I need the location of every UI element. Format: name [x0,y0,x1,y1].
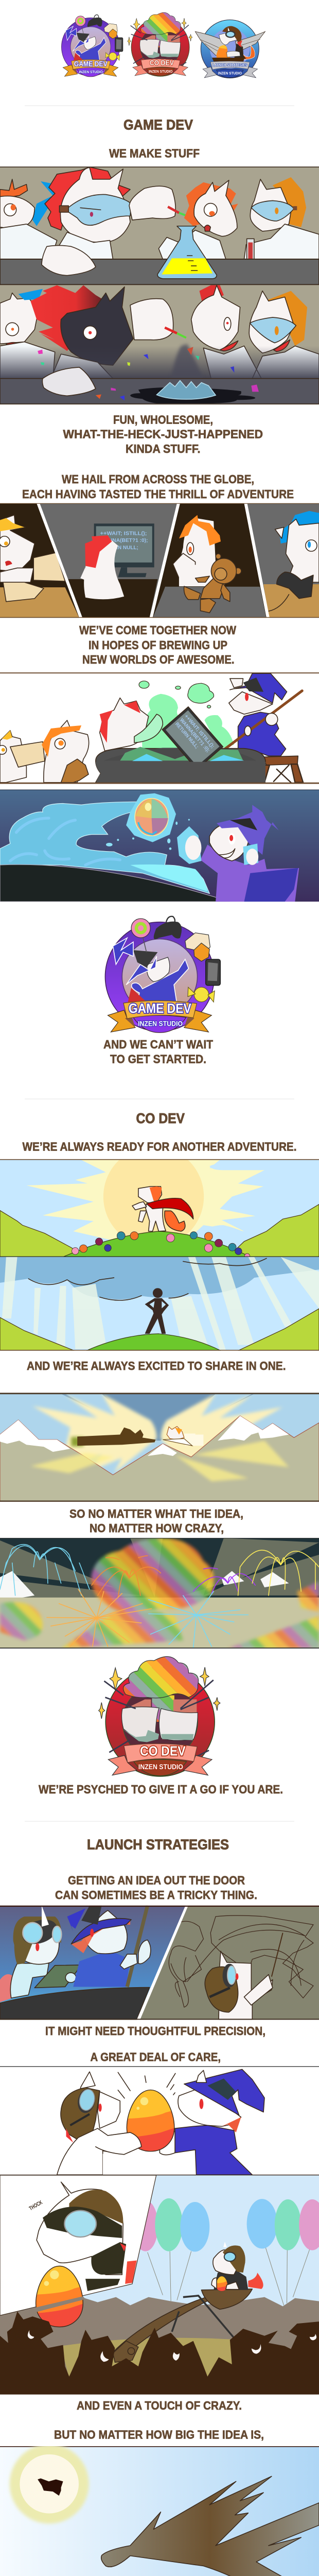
side hills [0,1205,319,1257]
balloons [133,2198,319,2305]
pilot pointing at map [205,1933,283,2020]
center hill [63,1231,250,1257]
monitor in cauldron: RETURN NULL; [174,721,200,750]
wizard with magic hands [177,805,299,902]
left startled unicorn [0,289,55,379]
left scientist [0,179,61,259]
smoke band [0,346,319,380]
caption: fun wholesome: KINDA STUFF. [126,442,201,455]
egg in close-up [34,2265,84,2329]
badge: game dev large: INZEN STUDIO [138,1020,183,1028]
monitor in cauldron: WANNA(BET?1 :0); [179,718,211,754]
caption: fun wholesome [63,413,263,455]
silhouette crowd [0,2311,319,2395]
caption: we've come together now: WE’VE COME TOGETHER NOW [79,623,236,637]
slice: programmer at monitor: ++WAIT; ISTILL(); [100,531,147,536]
caption: no matter what the idea: SO NO MATTER WHAT THE IDEA, [69,1507,243,1520]
pilot with clipboard [0,1906,81,2002]
mountain snow [0,1571,289,1602]
energy burst [32,1394,289,1481]
badge: co dev large: INZEN STUDIO [138,1763,183,1771]
caption: we're psyched: WE’RE PSYCHED TO GIVE IT A GO IF YOU ARE. [39,1783,283,1796]
panel: brewing in cauldron [0,672,319,784]
green smoke [139,681,234,751]
center scientist [158,180,238,259]
panel: unicorn on sunny hill [0,1159,319,1257]
panel: potion explosion [0,285,319,405]
badge: game dev large: GAME DEV [129,1001,191,1016]
caption: and we can't wait: AND WE CAN’T WAIT [103,1038,213,1051]
wizard with staff [67,1906,151,1987]
storm clouds [0,1257,319,1299]
header badge row [62,12,265,78]
right scientist with test tube [244,177,319,259]
sun rays [26,1160,267,1244]
olive field [61,2338,285,2379]
right slice map board [140,1906,319,2020]
slice: programmer at monitor [40,503,177,618]
crowd eyes [28,2330,316,2362]
caption: thoughtful precision: IT MIGHT NEED THOUGHTFUL PRECISION, [45,2024,265,2038]
badge: co dev large: CO DEV [140,1743,186,1759]
silhouette figure [145,1288,169,1334]
wildflowers [72,1232,250,1259]
lab table [0,259,319,284]
badge: game dev: GAME DEV [74,60,108,68]
caption: we've come together now [79,623,236,666]
panel: silhouette under clouds [0,1257,319,1351]
smoke plume [171,344,203,379]
teddy bear [184,554,241,613]
cauldron edge [0,1988,150,2020]
caption: and we can't wait: TO GET STARTED. [110,1053,206,1066]
ground [0,1598,319,1649]
caption: ready for adventure: WE’RE ALWAYS READY FOR ANOTHER ADVENTURE. [23,1140,296,1154]
panel: handling the egg [0,2066,319,2175]
badge: launch strategies: LAUNCH STRATEGIES [212,63,247,67]
right laughing unicorns [191,285,319,381]
glow over mountains [30,1440,289,1481]
idea bubble [126,793,176,842]
rays background [0,1538,319,1604]
ground [0,2297,319,2395]
water droplets [106,819,190,850]
pilot close-up [37,2182,137,2291]
red mane [100,701,140,743]
badge: co dev [128,12,192,76]
panel: soaring past the sun [0,2446,319,2576]
heading: launch strategies: LAUNCH STRATEGIES [87,1836,229,1853]
cauldron [96,747,265,783]
caption: touch of crazy: AND EVEN A TOUCH OF CRAZY. [77,2399,242,2412]
badge: game dev: INZEN STUDIO [79,70,103,74]
rainbow mushroom cloud [92,1538,214,1612]
slice: writer with papers [0,503,79,618]
main scientist with goggles [45,167,188,259]
tail fin [101,2477,319,2576]
caption: we hail from across the globe: WE HAIL FROM ACROSS THE GLOBE, [62,472,254,486]
left slice night backdrop [0,1906,186,2020]
caption: we hail from across the globe [22,472,294,501]
panel: planning and world map [0,1905,319,2020]
broken flask [156,381,216,399]
caption: we've come together now: IN HOPES OF BREWING UP [88,638,227,652]
dark sky center [102,1394,216,1440]
slice: programmer at monitor: WANNA(BET?1 :0); [100,538,148,544]
cloud outlines [28,1258,267,1300]
caption: getting an idea out the door: GETTING AN IDEA OUT THE DOOR [68,1873,245,1887]
panel: wizard conjures an idea [0,789,319,902]
sun disc [103,1146,204,1247]
badge: launch strategies: INZEN STUDIO [218,71,242,76]
panel: scientists mixing potion [0,166,319,285]
mountains [0,1416,319,1502]
caption: fun wholesome: WHAT-THE-HECK-JUST-HAPPENED [63,428,263,441]
panel: four team members [0,503,319,618]
vapour inhaled [134,714,163,743]
caption: no matter how big: BUT NO MATTER HOW BIG THE IDEA IS, [54,2428,264,2441]
fireworks fountains [0,1545,319,1598]
slice: gamer with controller [247,503,319,618]
monitor in cauldron [162,707,223,770]
caption: no matter what the idea: NO MATTER HOW CRAZY, [90,1521,224,1535]
wooden stool [260,756,303,783]
clouds [203,1160,319,1251]
caption: we hail from across the globe: EACH HAVING TASTED THE THRILL OF ADVENTURE [22,487,294,501]
badge: co dev large [99,1656,220,1776]
light rays [2,1257,319,1350]
water swirl [0,802,209,893]
wizard with egg [103,2070,264,2175]
rainbow ground patches [0,1581,319,1649]
badge: co dev: CO DEV [150,59,174,67]
wizard stirring [207,673,302,762]
slice: programmer at monitor: RETURN NULL; [100,545,138,551]
panel: mid-air fist bump [0,1393,319,1502]
cauldron front lip [96,762,265,784]
snow caps [0,1416,289,1456]
pilot with egg [57,2072,141,2175]
caped unicorn [132,1187,193,1231]
white close-up frame [0,2175,156,2315]
heading: game dev: GAME DEV [123,116,193,133]
arm on table [42,367,96,396]
hand on table [42,245,96,276]
cauldron rim [0,865,230,902]
flying shards [38,347,259,400]
caption: we've come together now: NEW WORLDS OF AWESOME. [82,653,235,666]
heading: co dev: CO DEV [136,1110,185,1126]
sparkle lines [118,2072,175,2098]
caption: great deal of care: A GREAT DEAL OF CARE, [91,2050,221,2064]
panel: catapult launch with balloons [0,2175,319,2395]
silhouette flying [71,1428,155,1446]
sun [10,2444,89,2523]
caption: and we can't wait [103,1038,213,1066]
route arrows [171,1924,305,1997]
caption: excited to share: AND WE’RE ALWAYS EXCITED TO SHARE IN ONE. [27,1359,286,1372]
panel: rainbow fireworks [0,1538,319,1649]
papers and bear carriers [0,720,89,783]
catapult [113,2289,252,2362]
unicorn flying [163,1427,203,1446]
diagonal gutters [37,503,270,618]
monitor in cauldron: ++WAIT; ISTILL(); [183,714,216,750]
caption: getting an idea out the door [55,1873,257,1902]
main unicorn face blackened [30,285,133,379]
fireworks bursts [47,1589,248,1648]
raised hand with pipette [130,299,186,340]
golden egg [126,2089,175,2154]
badge: launch strategies [195,20,265,78]
table scorched [0,379,319,404]
flask of yellow potion [157,226,217,279]
small pilot on catapult [211,2242,263,2292]
caption: fun wholesome: FUN, WHOLESOME, [113,413,213,427]
thock sound effect: THOCK [28,2199,44,2212]
caption: no matter what the idea [69,1507,243,1535]
caption: we make stuff: WE MAKE STUFF [109,147,200,160]
slice: crafter with teddy bear [153,503,267,618]
badge: co dev: INZEN STUDIO [149,69,172,74]
badge: game dev large [105,917,220,1032]
hand over egg [96,2132,141,2155]
continents map lines [169,1916,313,2007]
black puddle [130,387,255,403]
hills [0,1309,319,1351]
caption: getting an idea out the door: CAN SOMETIMES BE A TRICKY THING. [55,1888,257,1902]
red maned unicorn [100,698,149,751]
badge: game dev [62,15,123,77]
